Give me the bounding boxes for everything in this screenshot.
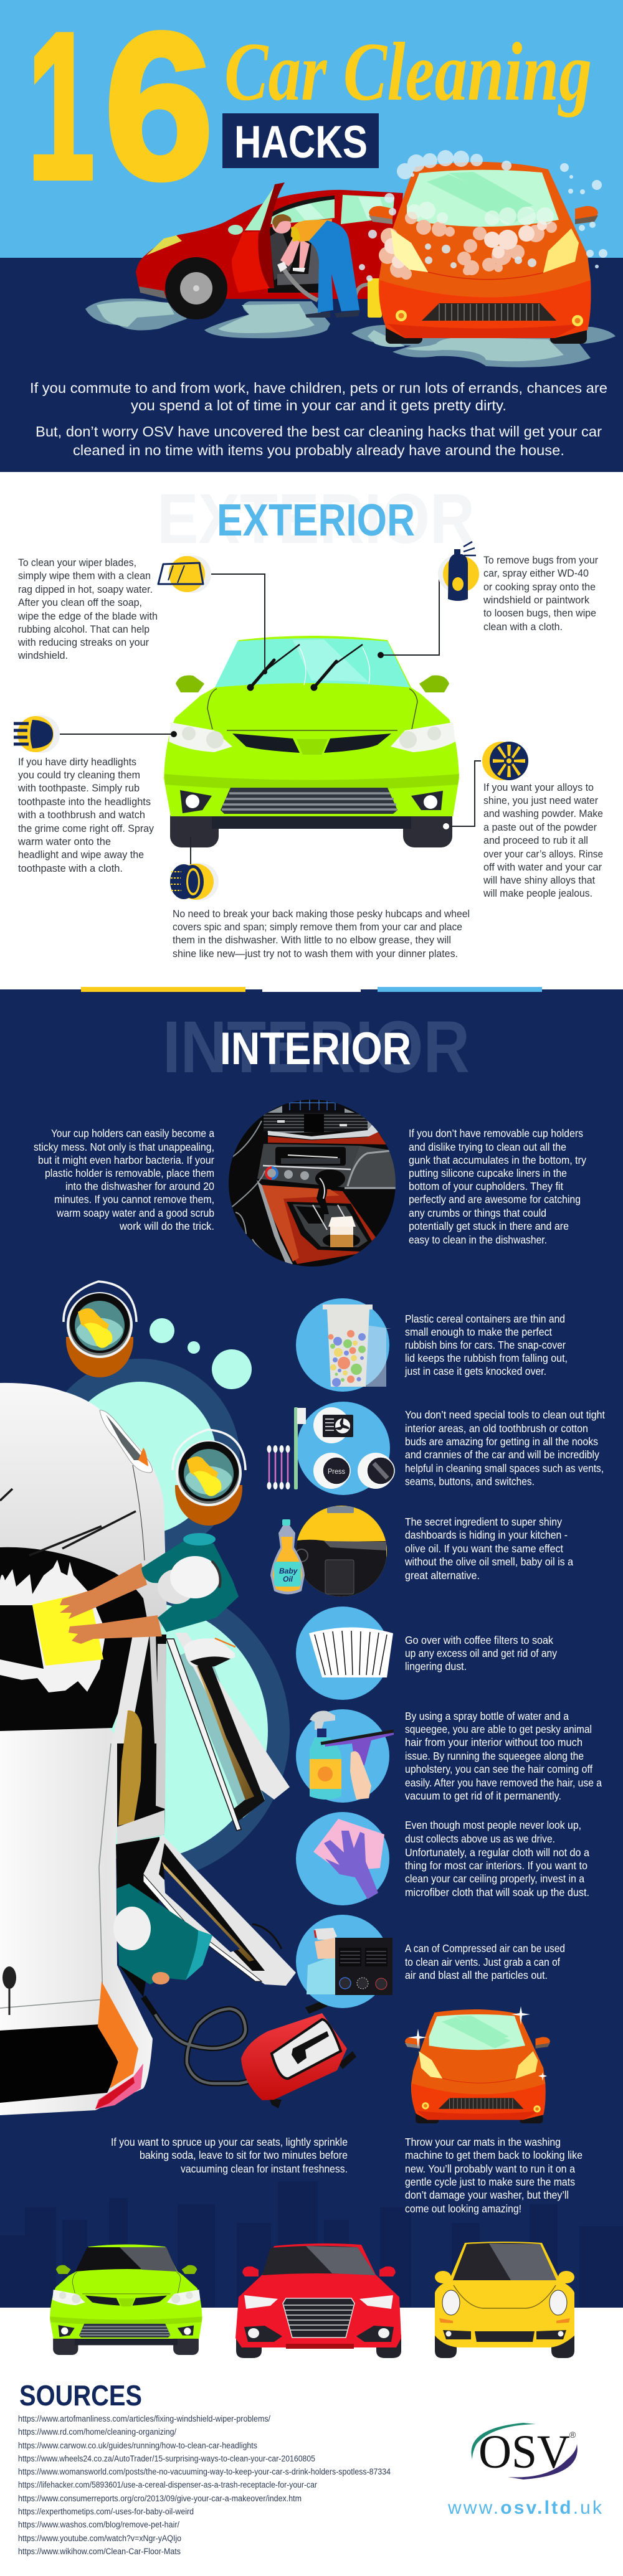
hacks label: HACKS xyxy=(234,117,368,167)
text: cereal containers xyxy=(404,1313,568,1377)
connectors xyxy=(55,574,481,864)
rear window xyxy=(0,2024,119,2103)
door white xyxy=(143,1834,296,1986)
text: hubcaps: covers spic and span; simply remove them from your car and place xyxy=(173,921,462,933)
text: special tools: seams, buttons, and switches. xyxy=(405,1475,535,1488)
sources list: https://lifehacker.com/5893601/use-a-cereal-dispenser-as-a-trash-receptacle-for-your-car xyxy=(18,2480,317,2489)
text: cup holders left: but it might even harbor bacteria. If your xyxy=(38,1154,214,1166)
text: cup holders right: and dislike trying to clean out all the xyxy=(409,1141,566,1153)
text: wiper blades xyxy=(17,557,158,661)
sources list: https://www.carwow.co.uk/guides/running/how-to-clean-car-headlights xyxy=(18,2441,257,2450)
logo text: OSV xyxy=(478,2426,570,2478)
text: headlights: you could try cleaning them xyxy=(18,769,140,781)
text: olive oil: without the olive oil smell, baby oil is a xyxy=(404,1555,573,1568)
window navy gap xyxy=(164,1868,240,1952)
text: headlights: toothpaste into the headlights xyxy=(18,796,151,808)
text: cup holders right: gunk that accumulates in the bottom, try xyxy=(409,1154,586,1166)
text: car seats: If you want to spruce up your car seats, lightly sprinkle xyxy=(111,2136,348,2148)
text: ceiling dust: Unfortunately, a regular cloth will not do a xyxy=(405,1846,589,1859)
side pillars xyxy=(112,1635,150,1743)
text: cup holders left: plastic holder is removable, place them xyxy=(45,1167,214,1179)
panel: header sky xyxy=(0,0,623,258)
windshield xyxy=(262,2246,376,2275)
windshield xyxy=(75,2247,177,2272)
door handle xyxy=(252,1924,282,1949)
text: bugs: windshield or paintwork xyxy=(483,594,589,606)
text: squeegee: upholstery, you can see the hair coming off xyxy=(405,1763,592,1775)
body xyxy=(241,2013,347,2100)
wipers xyxy=(0,1489,136,1555)
hood line xyxy=(454,2285,556,2308)
text: bugs: clean with a cloth. xyxy=(483,621,563,633)
text: compressed air: air and blast all the particles out. xyxy=(405,1969,548,1981)
lower arm xyxy=(69,1615,162,1644)
text: bugs: car, spray either WD-40 xyxy=(483,567,589,579)
sources list: https://www.wikihow.com/Clean-Car-Floor-Mats xyxy=(18,2547,181,2556)
icon: cotton buds and buttons: Press xyxy=(328,1467,345,1476)
logo arcs xyxy=(471,2423,536,2460)
windshield xyxy=(0,1547,150,1731)
illustration: red car with man vacuuming xyxy=(136,182,403,319)
wheel xyxy=(165,257,227,319)
text: cereal containers: lid keeps the rubbish from falling out, xyxy=(405,1352,568,1364)
text: bugs: or cooking spray onto the xyxy=(483,581,596,593)
text: car seats: vacuuming clean for instant freshness. xyxy=(181,2163,348,2175)
text: headlights: warm water onto the xyxy=(17,836,111,847)
text: bugs: to loosen bugs, then wipe xyxy=(483,607,596,619)
text: cup holders right: perfectly and are awesome for catching xyxy=(409,1193,581,1205)
text: squeegee: By using a spray bottle of water and a xyxy=(405,1710,569,1722)
text: alloys: off with water and your car xyxy=(483,861,602,873)
sparkles xyxy=(408,2006,547,2081)
text: wiper blades: with reducing streaks on your xyxy=(17,636,149,648)
text: alloys: shine, you just need water xyxy=(483,795,598,806)
sources heading: SOURCES xyxy=(19,2379,142,2412)
tail light xyxy=(98,1981,138,2088)
roof and body xyxy=(0,1725,153,2115)
fog lamps xyxy=(244,2326,394,2342)
text: squeegee: hair from your interior without too much xyxy=(405,1736,583,1748)
text: headlights: toothpaste with a cloth. xyxy=(18,862,123,874)
title xyxy=(27,0,592,222)
text: wiper blades: rag dipped in hot, soapy water. xyxy=(18,583,153,595)
lower lip xyxy=(286,2344,354,2349)
grille xyxy=(283,2298,354,2338)
man xyxy=(272,214,360,318)
headlight xyxy=(146,235,182,255)
text: wiper blades: To clean your wiper blades, xyxy=(18,557,136,569)
upper arm xyxy=(60,1563,147,1619)
text: headlights: the grime come right off. Spray xyxy=(18,823,154,834)
hose xyxy=(143,1997,265,2083)
text: alloys: and proceed to rub it all xyxy=(483,834,588,846)
text: special tools: and crannies of the car and will be incredibly xyxy=(405,1448,599,1461)
text: squeegee: easily. After you have removed the hair, use a xyxy=(405,1776,602,1789)
text: cup holders right: any crumbs or things that could xyxy=(409,1207,546,1219)
ghost heading: EXTERIOR xyxy=(157,479,475,558)
car interior xyxy=(268,227,325,293)
interior heading xyxy=(163,1006,470,1088)
intro text: cleaned in no time with items you probably already have around the house. xyxy=(73,442,564,458)
intro text xyxy=(30,380,607,458)
body xyxy=(235,2243,401,2347)
illustration: foamy orange car xyxy=(359,150,607,344)
windshield xyxy=(453,2243,556,2280)
section divider bars xyxy=(81,987,542,992)
intro text: But, don’t worry OSV have uncovered the best car cleaning hacks that will get your car xyxy=(36,423,602,440)
hand xyxy=(152,1972,169,1984)
collar xyxy=(183,1533,216,1545)
text: cup holders left: into the dishwasher for around 20 xyxy=(65,1180,214,1192)
text: cup holders right: potentially get stuck in there and are xyxy=(409,1220,569,1232)
puddles xyxy=(85,298,616,367)
text: car mats xyxy=(405,2136,583,2215)
foam xyxy=(0,1560,106,1692)
green car illustration xyxy=(164,636,459,847)
text: olive oil xyxy=(404,1516,573,1582)
sources list: https://www.youtube.com/watch?v=xNgr-yAQIjo xyxy=(18,2534,181,2543)
bottle label text: Baby xyxy=(279,1567,298,1575)
main heading: EXTERIOR xyxy=(217,496,415,545)
text: cup holders right: putting silicone cupcake liners in the xyxy=(409,1167,567,1179)
text: alloys: will make people jealous. xyxy=(483,887,592,899)
text: cup holders left: minutes. If you cannot remove them, xyxy=(54,1193,214,1205)
text: hubcaps: shine like new—just try not to wash them with your dinner plates. xyxy=(173,948,458,960)
OSV logo xyxy=(471,2423,578,2479)
icon: headlight xyxy=(14,715,60,753)
text: cereal containers: small enough to make the perfect xyxy=(405,1326,552,1338)
intro text: you spend a lot of time in your car and it gets pretty dirty. xyxy=(131,397,506,413)
icon: windshield xyxy=(158,555,211,593)
body xyxy=(435,2280,574,2347)
red car body xyxy=(136,190,403,299)
headlights xyxy=(391,229,428,272)
text: alloys: and washing powder. Make xyxy=(483,808,603,819)
icon: coffee filter xyxy=(296,1606,393,1700)
text: car mats: gentle cycle just to make sure the mats xyxy=(405,2176,575,2188)
sources list: https://www.wheels24.co.za/AutoTrader/15-surprising-ways-to-clean-your-car-20160805 xyxy=(18,2454,315,2463)
icon: hubcap tyre xyxy=(170,863,219,900)
title number 16 xyxy=(27,0,214,222)
chrome sill xyxy=(117,1810,164,1844)
text: cup holders right: bottom of your cupholders. They fit xyxy=(409,1180,563,1192)
text: olive oil: dashboards is hiding in your kitchen - xyxy=(405,1529,568,1541)
icon: glove and cloth xyxy=(296,1812,389,1905)
text: special tools xyxy=(405,1408,605,1488)
text: wiper blades: simply wipe them with a clean xyxy=(18,570,151,582)
text: coffee filters: lingering dust. xyxy=(405,1660,467,1673)
text: car seats xyxy=(111,2136,348,2175)
antenna xyxy=(2,1966,16,1989)
text: cup holders right: easy to clean in the dishwasher. xyxy=(409,1234,547,1246)
bottom car: green xyxy=(50,2245,202,2355)
website url: www.osv.ltd.uk xyxy=(447,2498,602,2518)
text: headlights: with a toothbrush and watch xyxy=(17,809,145,821)
icon: alloy wheel xyxy=(482,742,528,780)
text: squeegee: vacuum to get rid of it permanently. xyxy=(405,1790,561,1802)
sources list: https://www.womansworld.com/posts/the-no-vacuuming-way-to-keep-your-car-s-drink-holders-spotless-87334 xyxy=(18,2467,391,2476)
ghost heading: INTERIOR xyxy=(163,1006,470,1088)
cloth xyxy=(32,1592,103,1666)
windshield xyxy=(215,638,410,687)
icon: cotton buds and buttons xyxy=(267,1402,394,1495)
feet xyxy=(269,2000,356,2108)
text: cereal containers: Plastic cereal containers are thin and xyxy=(405,1313,565,1325)
icon: bucket top xyxy=(64,1281,136,1377)
mirrors xyxy=(242,2267,396,2276)
bottle label text xyxy=(279,1567,298,1583)
text: cup holders right xyxy=(409,1127,586,1246)
text: ceiling dust: thing for most car interiors. If you want to xyxy=(405,1859,587,1872)
tyres xyxy=(435,2332,574,2358)
text: headlights: with toothpaste. Simply rub xyxy=(17,782,140,794)
sources list: https://experthometips.com/-uses-for-baby-oil-weird xyxy=(18,2507,194,2516)
text: cup holders left: warm soapy water and a good scrub xyxy=(56,1207,214,1219)
text: car mats: don’t damage your washer, but they’ll xyxy=(405,2189,569,2201)
text: alloys: a paste out of the powder xyxy=(483,821,597,833)
text: cup holders left xyxy=(34,1127,214,1232)
registered mark: ® xyxy=(569,2430,576,2440)
roof seam xyxy=(0,1743,111,2008)
connector dots xyxy=(171,652,449,829)
person top left arms and cloth hands xyxy=(60,1533,239,1644)
text: squeegee xyxy=(405,1710,602,1802)
text: coffee filters xyxy=(405,1634,557,1673)
text: olive oil: great alternative. xyxy=(405,1569,480,1582)
text: special tools: buds are amazing for getting in all the nooks xyxy=(405,1435,598,1448)
sources list: https://www.washos.com/blog/remove-pet-hair/ xyxy=(18,2520,179,2529)
text: cup holders right: If you don’t have removable cup holders xyxy=(409,1127,583,1139)
lower grille xyxy=(443,2330,566,2342)
icon: spray bottle and squeegee xyxy=(296,1709,394,1803)
text: alloys: over your car’s alloys. Rinse xyxy=(483,848,603,860)
panel: header navy ground xyxy=(0,258,623,472)
text: compressed air xyxy=(405,1942,565,1981)
text: olive oil: olive oil. If you want the same effect xyxy=(405,1542,563,1555)
text: hubcaps: them in the dishwasher. With little to no elbow grease, they will xyxy=(173,934,451,946)
text: wiper blades: wipe the edge of the blade with xyxy=(17,610,158,622)
skyline silhouette xyxy=(0,2181,623,2308)
text: car mats: come out looking amazing! xyxy=(405,2202,521,2215)
dashboard illustration xyxy=(224,1096,399,1270)
bumper xyxy=(139,286,166,299)
yellow vacuum xyxy=(368,278,382,318)
tyres xyxy=(236,2335,401,2358)
sources list: https://www.artofmanliness.com/articles/fixing-windshield-wiper-problems/ xyxy=(18,2414,270,2423)
text: hubcaps xyxy=(173,908,470,960)
text: headlights: headlight and wipe away the xyxy=(18,849,144,861)
text: headlights xyxy=(17,756,154,874)
roof xyxy=(449,2242,560,2280)
shirt xyxy=(117,1884,212,1984)
text: special tools: You don’t need special tools to clean out tight xyxy=(405,1408,605,1421)
clean orange car with sparkles xyxy=(405,2006,550,2123)
text: car mats: Throw your car mats in the washing xyxy=(405,2136,561,2148)
icon: compressed air and vents xyxy=(296,1915,392,2008)
text: squeegee: squeegee, you are able to get pesky animal xyxy=(405,1723,592,1735)
foam on sky xyxy=(397,150,483,179)
text: alloys: If you want your alloys to xyxy=(483,781,594,793)
text: car seats: baking soda, leave to sit for two minutes before xyxy=(140,2149,348,2161)
shirt xyxy=(141,1542,239,1632)
icon: dashboard and baby oil xyxy=(270,1506,387,1597)
car body xyxy=(164,636,459,847)
text: ceiling dust: Even though most people never look up, xyxy=(405,1819,581,1831)
open door upper xyxy=(166,1633,290,1831)
text: wiper blades: windshield. xyxy=(17,649,68,661)
mirrors xyxy=(435,2271,451,2283)
text: ceiling dust: clean your car ceiling properly, invest in a xyxy=(405,1872,584,1885)
icon: bucket lower xyxy=(173,1430,245,1526)
car windows xyxy=(270,195,394,224)
bottom car: yellow xyxy=(435,2242,574,2358)
text: coffee filters: up any excess oil and get rid of any xyxy=(405,1647,557,1659)
panel: interior navy xyxy=(0,989,623,2308)
windshield foam xyxy=(407,202,554,225)
white car top view xyxy=(0,1383,167,2115)
intro text: If you commute to and from work, have children, pets or run lots of errands, chances are xyxy=(30,380,607,396)
text: special tools: interior areas, an old toothbrush or cotton xyxy=(405,1422,588,1435)
head xyxy=(113,1907,151,1950)
main heading: INTERIOR xyxy=(220,1024,411,1074)
text: ceiling dust: microfiber cloth that will soak up the dust. xyxy=(405,1886,589,1899)
headlights xyxy=(244,2295,393,2309)
open door xyxy=(245,182,285,230)
indicators xyxy=(439,2318,570,2323)
car body xyxy=(369,162,598,344)
seat xyxy=(118,1710,142,1826)
text: alloys xyxy=(483,781,603,899)
text: cereal containers: rubbish bins for cars. The snap-cover xyxy=(405,1339,566,1351)
sources list: https://www.rd.com/home/cleaning-organizing/ xyxy=(18,2427,176,2437)
head xyxy=(158,1556,221,1604)
icon: cereal container xyxy=(296,1298,391,1392)
panel xyxy=(272,2019,341,2078)
hood xyxy=(0,1383,167,1644)
text: squeegee: issue. By running the squeegee along the xyxy=(405,1750,584,1762)
bottom car: red xyxy=(235,2243,401,2358)
text: bugs xyxy=(483,554,598,633)
hose xyxy=(282,266,318,300)
bottle label text: Oil xyxy=(283,1575,293,1583)
text: ceiling dust xyxy=(405,1819,589,1899)
bottle xyxy=(270,1526,305,1594)
headlights xyxy=(442,2290,460,2315)
text: car mats: new. You’ll probably want to run it on a xyxy=(405,2163,575,2175)
icon: spray can xyxy=(438,542,479,601)
text: wiper blades: rubbing alcohol. That can help xyxy=(18,623,150,635)
text: wiper blades: After you clean off the soap, xyxy=(18,597,142,608)
vacuum cleaner xyxy=(143,1997,356,2108)
text: bugs: To remove bugs from your xyxy=(483,554,598,566)
foam highlight xyxy=(384,220,547,268)
text: compressed air: to clean air vents. Just grab a can of xyxy=(405,1956,560,1968)
handle xyxy=(292,2031,329,2064)
text: compressed air: A can of Compressed air can be used xyxy=(405,1942,565,1955)
sources list xyxy=(18,2414,391,2556)
dashboard circle xyxy=(296,1506,387,1597)
door strips xyxy=(143,1874,262,1981)
text: cup holders left: work will do the trick. xyxy=(119,1220,214,1232)
text: ceiling dust: dust collects above us as we drive. xyxy=(405,1833,555,1845)
hood badge xyxy=(100,1410,153,1473)
foam on body xyxy=(379,212,557,280)
seam xyxy=(133,1465,145,1560)
bubbles xyxy=(359,161,607,281)
text: cup holders left: sticky mess. Not only is that unappealing, xyxy=(34,1141,214,1153)
open door lower with second person xyxy=(113,1834,296,1986)
sleeve xyxy=(186,1930,212,1980)
text: olive oil: The secret ingredient to super shiny xyxy=(405,1516,562,1528)
background circles behind white car xyxy=(0,1318,290,1882)
text: car mats: machine to get them back to looking like xyxy=(405,2149,583,2161)
text: cereal containers: just in case it gets knocked over. xyxy=(404,1365,546,1377)
text: alloys: will have shiny alloys that xyxy=(483,874,595,886)
text: coffee filters: Go over with coffee filters to soak xyxy=(405,1634,553,1646)
hacks box xyxy=(222,113,379,168)
wipers xyxy=(250,660,336,687)
text: headlights: If you have dirty headlights xyxy=(18,756,136,768)
text: hubcaps: No need to break your back making those pesky hubcaps and wheel xyxy=(173,908,470,920)
text: cup holders left: Your cup holders can easily become a xyxy=(51,1127,214,1139)
exterior heading xyxy=(157,479,475,558)
sources list: https://www.consumerreports.org/cro/2013/09/give-your-car-a-makeover/index.htm xyxy=(18,2494,302,2503)
